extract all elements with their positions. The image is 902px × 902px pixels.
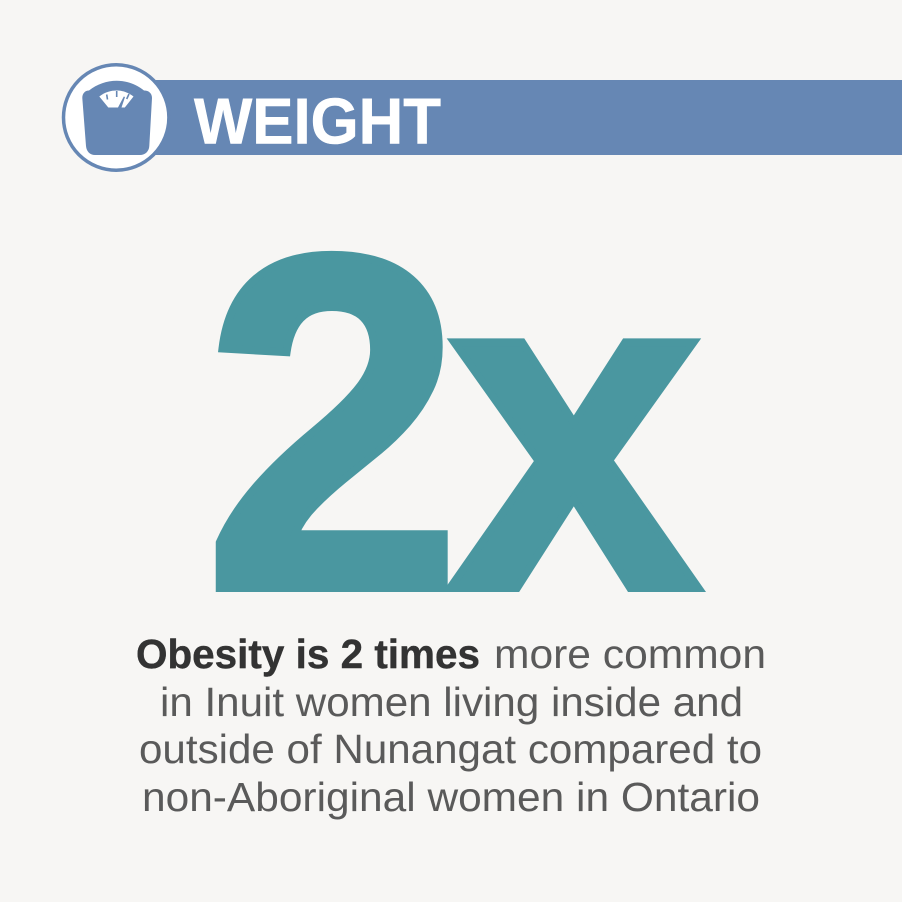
- line 1: more common: [494, 631, 766, 677]
- numeral 2: 2: [204, 156, 462, 689]
- banner bar: [150, 80, 902, 155]
- multiplication x: x: [447, 167, 705, 687]
- heading: WEIGHT: WEIGHT: [194, 84, 441, 158]
- icon: bathroom scale in circle: [63, 65, 169, 170]
- line 1: [136, 631, 766, 677]
- line 4: non-Aboriginal women in Ontario: [142, 774, 760, 820]
- description text: [136, 631, 766, 820]
- header banner: [63, 65, 902, 170]
- line 2: in Inuit women living inside and: [160, 679, 743, 725]
- line 3: outside of Nunangat compared to: [139, 726, 762, 772]
- big statistic: 2x: [204, 156, 705, 689]
- line 1: Obesity is 2 times: [136, 631, 480, 677]
